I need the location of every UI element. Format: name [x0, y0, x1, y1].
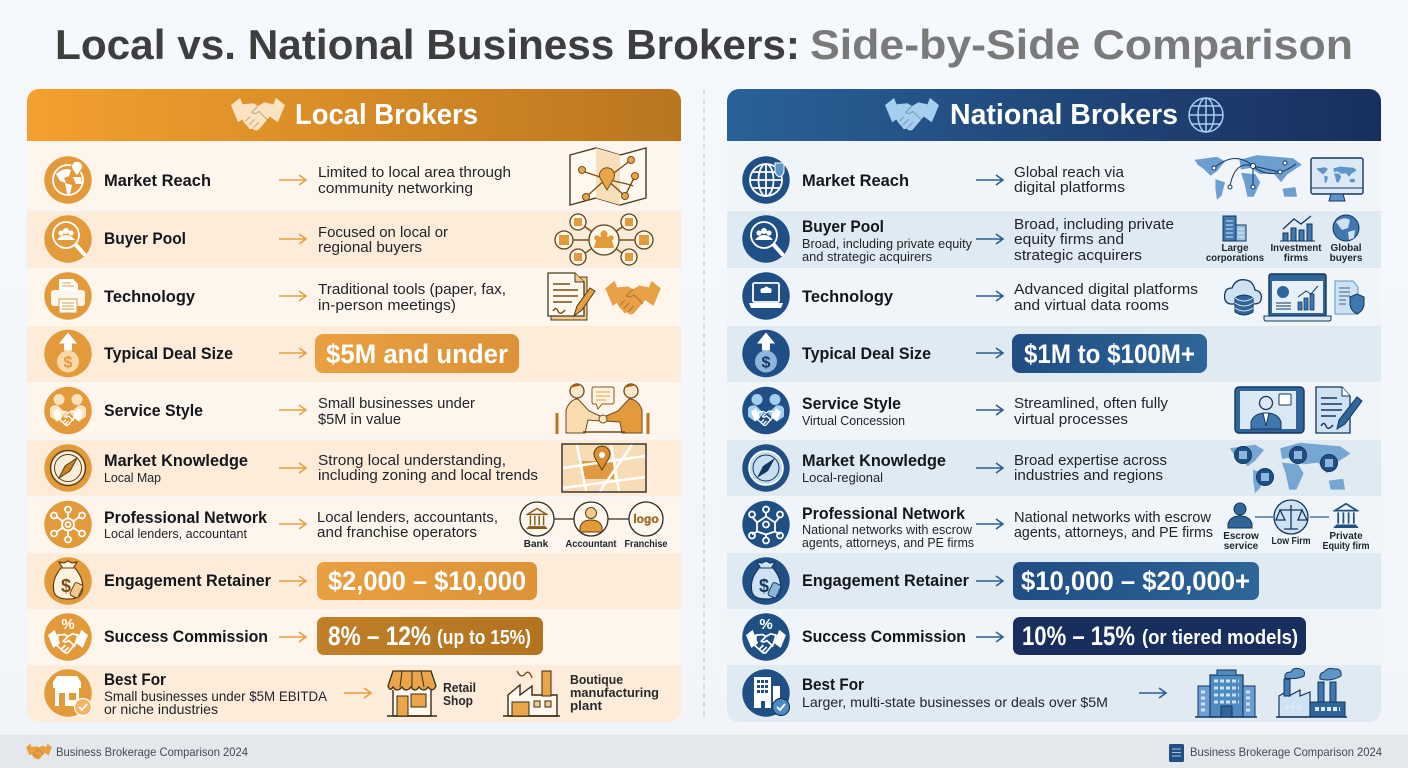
- value pill: $1M to $100M+: [1024, 339, 1195, 369]
- row: market knowledge: [727, 440, 1381, 496]
- icon: retail shop: [387, 671, 437, 716]
- row: service style: Virtual Concession: [802, 414, 905, 428]
- arrow: [976, 463, 1003, 473]
- row: service style: virtual processes: [1014, 411, 1128, 428]
- row: service style: Streamlined, often fully: [1014, 395, 1169, 412]
- icon: handshake: [885, 98, 939, 131]
- icon: handshake with percent: [742, 613, 790, 661]
- row: service style: Small businesses under: [318, 395, 475, 412]
- row: success commission: Success Commission: [802, 627, 966, 646]
- value pill: $5M and under: [326, 339, 508, 369]
- arrow: [976, 632, 1003, 642]
- icon: laptop with cloud: [742, 272, 790, 320]
- arrow: [976, 175, 1003, 185]
- icon: storefront with check: [44, 669, 92, 717]
- row: technology: [27, 269, 681, 326]
- icon: professional chain: Private: [1329, 531, 1363, 542]
- icon: globe: [1189, 98, 1223, 132]
- icon: globe grid: [742, 156, 790, 204]
- value pill: [1013, 617, 1306, 655]
- icon: globe with pin: [44, 156, 92, 204]
- arrow: [279, 234, 306, 244]
- row: professional network: [727, 497, 1381, 553]
- arrow: [976, 291, 1003, 301]
- row: best for: Retail: [443, 680, 476, 695]
- icon: global buyers: Global: [1330, 243, 1362, 254]
- row: engagement retainer: [27, 553, 681, 609]
- footer bar: Business Brokerage Comparison 2024: [56, 745, 248, 759]
- row: market reach: [727, 141, 1381, 210]
- row: best for: manufacturing: [570, 685, 659, 700]
- row: best for: Boutique: [570, 672, 623, 687]
- icon: money bag: [44, 557, 92, 605]
- icon: large office building: [1195, 670, 1257, 717]
- value pill: $10,000 – $20,000+: [1021, 566, 1250, 596]
- row: market reach: Market Reach: [104, 171, 211, 190]
- row: technology: Advanced digital platforms: [1014, 281, 1198, 298]
- arrow: [976, 405, 1003, 415]
- row: professional network: National networks with escrow: [1014, 509, 1211, 526]
- row: service style: Service Style: [802, 394, 901, 413]
- panel: local brokers: [27, 89, 681, 722]
- row: professional network: agents, attorneys, and PE firms: [802, 536, 974, 550]
- local header: [27, 89, 681, 141]
- national header: National Brokers: [950, 99, 1178, 131]
- row: service style: $5M in value: [318, 411, 401, 428]
- arrow: [344, 688, 371, 698]
- row: service style: [727, 382, 1381, 439]
- icon: money bag: [742, 557, 790, 605]
- row: buyer pool: Broad, including private equity: [802, 237, 973, 251]
- icon: global buyers: [1330, 215, 1363, 264]
- arrow: [279, 291, 306, 301]
- row: service style: Service Style: [104, 401, 203, 420]
- row: market reach: Global reach via: [1014, 164, 1125, 181]
- icon: magnifier with people: [742, 215, 790, 263]
- row: best for: Shop: [443, 693, 473, 708]
- arrow: [279, 632, 306, 642]
- row: best for: Small businesses under $5M EBITDA: [104, 688, 328, 704]
- title: Local vs. National Business Brokers:: [55, 21, 800, 68]
- icon: professional chain: Bank: [524, 539, 549, 550]
- icon: large corporations: Large: [1221, 243, 1249, 254]
- row: professional network: [27, 497, 681, 553]
- row: success commission: [727, 609, 1381, 665]
- icon: professional chain: [520, 502, 668, 550]
- value pill: $2,000 – $10,000: [328, 566, 526, 596]
- title: [55, 21, 1353, 68]
- national header: [727, 89, 1381, 141]
- icon: cloud database: [1225, 280, 1261, 315]
- icon: investment firms: Investment: [1270, 243, 1322, 254]
- icon: office with check: [742, 669, 790, 717]
- row: best for: or niche industries: [104, 701, 218, 717]
- icon: handshake with percent: %: [759, 616, 773, 633]
- row: market knowledge: Strong local understanding,: [318, 452, 506, 469]
- row: technology: Technology: [802, 287, 894, 306]
- value pill: [1012, 334, 1207, 373]
- icon: professional chain: [1223, 500, 1370, 552]
- icon: printer: [44, 272, 92, 320]
- icon: clipboard document: [1169, 744, 1184, 762]
- icon: network nodes: [44, 501, 92, 548]
- icon: money with up arrow: $: [762, 354, 771, 372]
- icon: professional chain: logo: [633, 512, 659, 526]
- icon: compass: [44, 444, 92, 492]
- row: technology: in-person meetings): [318, 297, 456, 314]
- icon: document with shield: [1335, 281, 1364, 314]
- row: market reach: digital platforms: [1014, 179, 1125, 196]
- row: professional network: Professional Network: [104, 508, 268, 527]
- icon: professional chain: Franchise: [624, 539, 668, 550]
- icon: video call tablet: [1235, 387, 1304, 433]
- footer bar: Business Brokerage Comparison 2024: [1190, 745, 1382, 759]
- icon: money with up arrow: [44, 330, 92, 377]
- row: success commission: [27, 609, 681, 665]
- arrow: [976, 576, 1003, 586]
- icon: large factory: [1276, 668, 1347, 717]
- row: market reach: Limited to local area through: [318, 164, 511, 181]
- row: technology: [727, 269, 1381, 326]
- row: market knowledge: Market Knowledge: [802, 451, 946, 470]
- icon: people shaking hands: [742, 387, 790, 434]
- row: buyer pool: [27, 211, 681, 268]
- title: Side-by-Side Comparison: [810, 21, 1353, 68]
- row: market reach: Market Reach: [802, 171, 909, 190]
- icon: laptop dashboard: [1264, 274, 1331, 321]
- row: market knowledge: including zoning and local trends: [318, 467, 538, 484]
- row: buyer pool: [727, 211, 1381, 268]
- row: technology: and virtual data rooms: [1014, 297, 1169, 314]
- row: typical deal size: [727, 326, 1381, 382]
- icon: folded map with pins: [570, 148, 646, 205]
- arrow: [279, 519, 306, 529]
- row: market knowledge: Market Knowledge: [104, 451, 248, 470]
- arrow: [279, 463, 306, 473]
- icon: global buyers: buyers: [1330, 253, 1363, 264]
- row: market knowledge: Local Map: [104, 471, 161, 485]
- row: buyer pool: and strategic acquirers: [802, 250, 932, 264]
- icon: network nodes: [742, 501, 790, 548]
- arrow: [279, 576, 306, 586]
- row: professional network: Local lenders, accountants,: [317, 509, 498, 526]
- icon: handshake: [26, 744, 52, 759]
- icon: paper document and pen: [548, 273, 595, 320]
- icon: handshake with percent: %: [61, 616, 75, 633]
- row: market knowledge: Local-regional: [802, 471, 883, 485]
- icon: buyer network: [555, 214, 653, 265]
- value pill: 10% – 15%: [1022, 621, 1135, 651]
- icon: professional chain: service: [1224, 541, 1259, 552]
- row: market reach: [27, 141, 681, 210]
- icon: local street map: [562, 444, 646, 492]
- footer bar: [0, 735, 1408, 768]
- icon: handshake: [231, 98, 285, 131]
- icon: world map connections: [1195, 155, 1302, 200]
- row: professional network: National networks with escrow: [802, 523, 973, 537]
- value pill: (up to 15%): [437, 627, 531, 649]
- value pill: [317, 617, 543, 655]
- icon: professional chain: Escrow: [1223, 531, 1259, 542]
- icon: magnifier with people: [44, 215, 92, 263]
- value pill: 8% – 12%: [328, 621, 431, 651]
- row: professional network: Professional Network: [802, 504, 966, 523]
- arrow: [976, 234, 1003, 244]
- row: market knowledge: [27, 440, 681, 496]
- row: technology: Technology: [104, 287, 196, 306]
- row: technology: Traditional tools (paper, fax,: [318, 281, 506, 298]
- icon: monitor: [1311, 158, 1363, 201]
- icon: money bag: $: [61, 576, 71, 596]
- row: buyer pool: Broad, including private: [1014, 216, 1174, 233]
- row: best for: Larger, multi-state businesses or deals over $5M: [802, 694, 1108, 710]
- icon: professional chain: Low Firm: [1272, 536, 1311, 547]
- icon: professional chain: Accountant: [566, 539, 617, 550]
- icon: large corporations: [1206, 216, 1264, 264]
- icon: investment firms: firms: [1284, 253, 1309, 264]
- row: best for: Best For: [802, 675, 864, 694]
- icon: compass: [742, 444, 790, 492]
- row: best for: Best For: [104, 670, 166, 689]
- row: professional network: Local lenders, accountant: [104, 527, 248, 541]
- row: professional network: agents, attorneys, and PE firms: [1014, 524, 1213, 541]
- row: engagement retainer: [727, 553, 1381, 609]
- arrow: [976, 348, 1003, 358]
- icon: people shaking hands: [44, 387, 92, 434]
- arrow: [279, 175, 306, 185]
- icon: money with up arrow: [742, 330, 790, 377]
- row: engagement retainer: Engagement Retainer: [104, 571, 271, 590]
- icon: world map with pins: [1230, 443, 1350, 493]
- arrow: [1139, 688, 1166, 698]
- row: buyer pool: Buyer Pool: [802, 217, 884, 236]
- row: typical deal size: [27, 326, 681, 382]
- row: typical deal size: Typical Deal Size: [104, 344, 233, 363]
- row: buyer pool: equity firms and: [1014, 231, 1124, 248]
- row: buyer pool: regional buyers: [318, 239, 422, 256]
- icon: professional chain: Equity firm: [1322, 541, 1370, 552]
- row: service style: [27, 382, 681, 439]
- icon: investment firms: [1270, 216, 1322, 264]
- icon: document with pen: [1316, 387, 1362, 433]
- local header: Local Brokers: [295, 99, 478, 131]
- panel: national brokers: [727, 89, 1381, 722]
- row: buyer pool: Buyer Pool: [104, 229, 186, 248]
- arrow: [976, 519, 1003, 529]
- row: market knowledge: industries and regions: [1014, 467, 1163, 484]
- row: typical deal size: Typical Deal Size: [802, 344, 931, 363]
- arrow: [279, 348, 306, 358]
- value pill: (or tiered models): [1142, 627, 1298, 649]
- row: best for: [727, 665, 1381, 722]
- row: best for: plant: [570, 698, 603, 713]
- icon: handshake: [605, 281, 661, 314]
- icon: money with up arrow: $: [64, 354, 73, 372]
- row: buyer pool: Focused on local or: [318, 224, 448, 241]
- icon: handshake with percent: [44, 613, 92, 661]
- row: professional network: and franchise operators: [317, 524, 477, 541]
- icon: large corporations: corporations: [1206, 253, 1264, 264]
- row: market reach: community networking: [318, 180, 473, 197]
- row: best for: [27, 665, 681, 722]
- row: success commission: Success Commission: [104, 627, 268, 646]
- row: engagement retainer: Engagement Retainer: [802, 571, 969, 590]
- icon: money bag: $: [759, 576, 769, 596]
- arrow: [279, 405, 306, 415]
- icon: boutique factory: [503, 671, 560, 716]
- row: buyer pool: strategic acquirers: [1014, 247, 1142, 264]
- row: market knowledge: Broad expertise across: [1014, 452, 1167, 469]
- icon: two people at table: [557, 384, 648, 434]
